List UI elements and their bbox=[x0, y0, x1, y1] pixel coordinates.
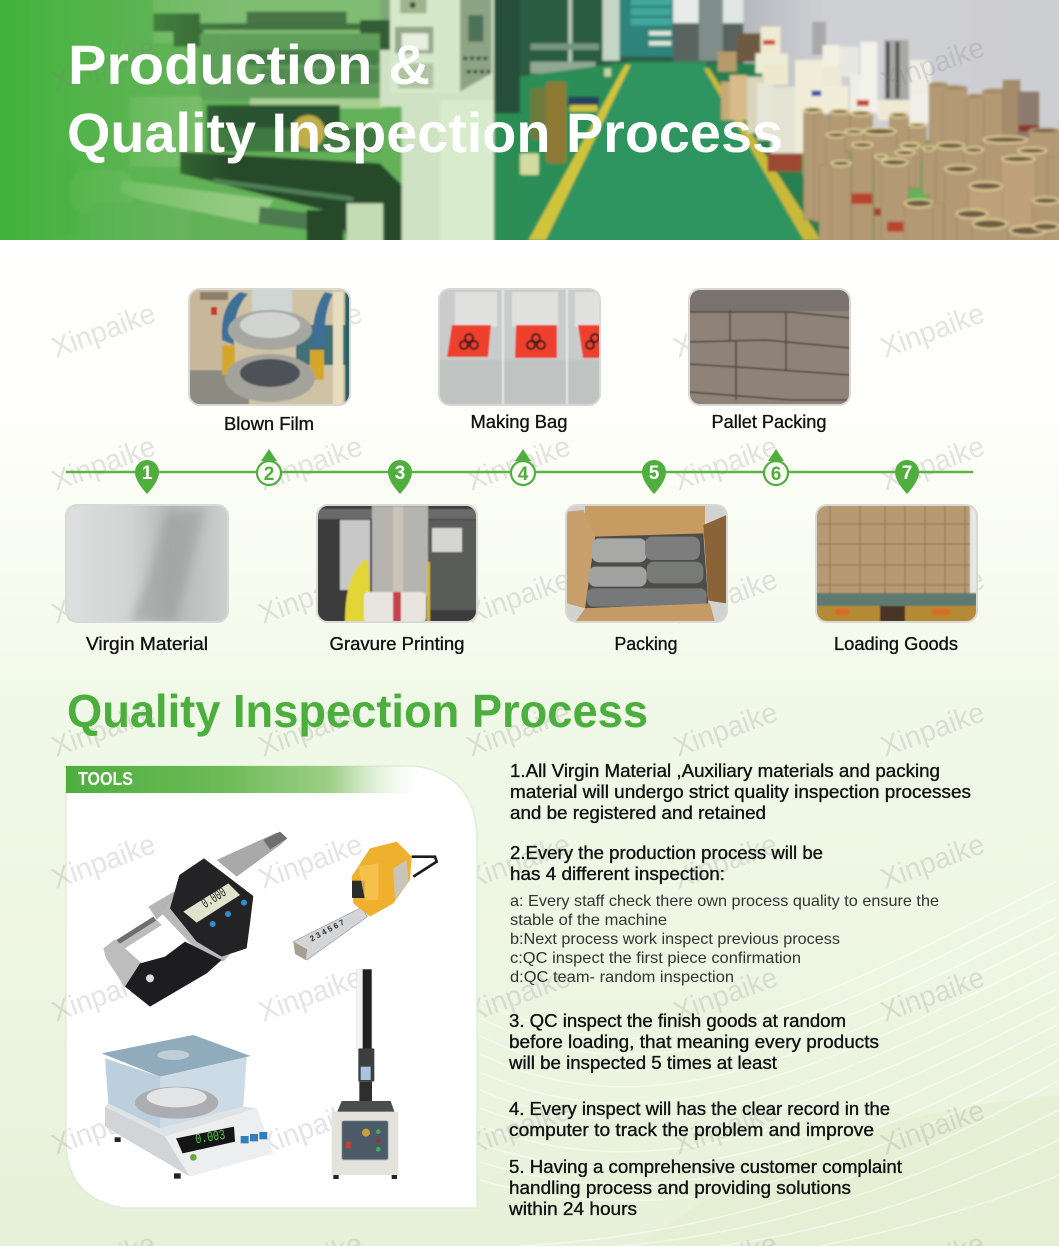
watermarks: Xinpaike bbox=[876, 829, 989, 896]
step marker 5 bbox=[642, 460, 666, 494]
watermarks: Xinpaike bbox=[876, 1095, 989, 1162]
step marker 2 bbox=[257, 449, 281, 485]
text block: item 5: within 24 hours bbox=[508, 1199, 637, 1219]
watermarks on panel: Xinpaike bbox=[254, 829, 367, 896]
watermarks: Xinpaike bbox=[669, 829, 782, 896]
watermarks: Xinpaike bbox=[254, 298, 367, 365]
text block: item 2 bbox=[510, 843, 939, 986]
step labels: bottom row bbox=[86, 634, 958, 654]
watermarks on panel: Xinpaike bbox=[254, 1095, 367, 1162]
watermarks: Xinpaike bbox=[669, 431, 782, 498]
step marker 5: 5 bbox=[649, 463, 660, 484]
step labels: top row bbox=[224, 412, 826, 434]
watermarks: Xinpaike bbox=[669, 1095, 782, 1162]
icon: tape measure bbox=[293, 842, 437, 960]
step photo: blown film bbox=[189, 289, 350, 406]
watermarks: Xinpaike bbox=[254, 697, 367, 764]
aisle objects bbox=[530, 88, 547, 140]
step marker 4: 4 bbox=[518, 464, 529, 485]
icon: digital micrometer bbox=[103, 832, 287, 1007]
step marker 7 bbox=[895, 460, 919, 494]
step marker 3 bbox=[388, 460, 412, 494]
watermarks on panel: Xinpaike bbox=[47, 1095, 160, 1162]
watermarks: Xinpaike bbox=[876, 697, 989, 764]
step marker 4 bbox=[511, 449, 535, 485]
watermarks: Xinpaike bbox=[876, 431, 989, 498]
step labels: top row: Blown Film bbox=[224, 414, 314, 434]
watermarks over hero bbox=[51, 42, 984, 92]
cabinet bbox=[402, 0, 500, 247]
text block: item 3: before loading, that meaning every products bbox=[509, 1032, 879, 1052]
watermarks: Xinpaike bbox=[462, 431, 575, 498]
watermarks: Xinpaike bbox=[669, 962, 782, 1029]
icon: precision balance bbox=[102, 1035, 273, 1179]
watermarks: Xinpaike bbox=[47, 431, 160, 498]
step photo: pallet packing bbox=[689, 289, 850, 405]
watermarks: Xinpaike bbox=[462, 829, 575, 896]
text block: item 2: 2.Every the production process will be bbox=[510, 843, 823, 863]
step marker 2: 2 bbox=[264, 464, 274, 485]
watermarks: Xinpaike bbox=[254, 431, 367, 498]
text block: item 2: a: Every staff check there own process quality to ensure the bbox=[510, 893, 939, 910]
step photo: making bag bbox=[439, 289, 600, 405]
text block: item 4 bbox=[509, 1099, 890, 1140]
step marker 7: 7 bbox=[902, 463, 912, 484]
watermarks: Xinpaike bbox=[876, 564, 989, 631]
step labels: bottom row: Loading Goods bbox=[834, 634, 958, 654]
text block: item 2: b:Next process work inspect previous process bbox=[510, 931, 840, 948]
step photo: gravure printing bbox=[317, 505, 477, 622]
machine area, green tinted bbox=[110, 0, 496, 240]
watermarks: Xinpaike bbox=[462, 962, 575, 1029]
watermarks on panel: Xinpaike bbox=[47, 962, 160, 1029]
frame bbox=[566, 505, 727, 622]
step labels: bottom row: Gravure Printing bbox=[330, 634, 464, 654]
left green fade bbox=[0, 0, 230, 240]
step labels: top row: Making Bag bbox=[470, 412, 568, 432]
watermarks: Xinpaike bbox=[462, 697, 575, 764]
step labels: top row: Pallet Packing bbox=[712, 412, 826, 432]
step marker 1: 1 bbox=[142, 463, 153, 484]
watermarks: Xinpaike bbox=[462, 564, 575, 631]
aisle area bbox=[494, 0, 1059, 247]
step photo: packing bbox=[566, 505, 728, 622]
icon: precision balance: 0.003 bbox=[194, 1128, 226, 1148]
tools header bar bbox=[66, 766, 421, 793]
watermarks on panel: Xinpaike bbox=[47, 829, 160, 896]
watermarks on panel: Xinpaike bbox=[254, 962, 367, 1029]
step labels: bottom row: Packing bbox=[614, 634, 678, 654]
watermarks: Xinpaike bbox=[669, 697, 782, 764]
title: Production & bbox=[68, 33, 430, 96]
icon: tape measure: 2 3 4 5 6 7 bbox=[308, 918, 346, 943]
tools header bar: TOOLS bbox=[78, 769, 133, 789]
text block: item 2: has 4 different inspection: bbox=[510, 864, 725, 884]
text block: item 3 bbox=[508, 1011, 879, 1073]
watermarks bbox=[47, 298, 989, 1246]
text block: item 1 bbox=[510, 761, 971, 823]
watermarks over hero: Xinpaike bbox=[47, 32, 160, 99]
text block: item 4: 4. Every inspect will has the clear record in the bbox=[509, 1099, 890, 1119]
watermarks: Xinpaike bbox=[47, 697, 160, 764]
frame bbox=[189, 289, 350, 405]
watermarks: Xinpaike bbox=[254, 564, 367, 631]
text block: item 1: material will undergo strict quality inspection processes bbox=[510, 782, 971, 802]
text block: item 1: 1.All Virgin Material ,Auxiliary materials and packing bbox=[510, 761, 940, 781]
text block: item 2: stable of the machine bbox=[510, 912, 667, 929]
text block: item 4: computer to track the problem and improve bbox=[509, 1120, 874, 1140]
step photo: virgin material bbox=[66, 505, 228, 622]
watermarks: Xinpaike bbox=[876, 298, 989, 365]
watermarks on panel bbox=[47, 829, 367, 1162]
watermarks: Xinpaike bbox=[47, 298, 160, 365]
step marker 1 bbox=[135, 460, 159, 494]
watermarks: Xinpaike bbox=[669, 298, 782, 365]
text block: item 1: and be registered and retained bbox=[510, 803, 766, 823]
watermarks over hero: Xinpaike bbox=[876, 32, 989, 99]
frame bbox=[66, 505, 228, 622]
step marker 6: 6 bbox=[771, 464, 781, 485]
frame bbox=[689, 289, 850, 405]
watermarks: Xinpaike bbox=[462, 1095, 575, 1162]
hero banner: factory photo bbox=[0, 0, 1059, 247]
frame bbox=[317, 505, 477, 622]
watermarks: Xinpaike bbox=[876, 962, 989, 1029]
text block: item 5: 5. Having a comprehensive customer complaint bbox=[509, 1157, 902, 1177]
title: Quality Inspection Process bbox=[67, 101, 783, 164]
text block: item 5: handling process and providing solutions bbox=[509, 1178, 851, 1198]
text block: item 3: 3. QC inspect the finish goods at random bbox=[509, 1011, 846, 1031]
frame bbox=[816, 505, 977, 622]
white film rolls bbox=[747, 22, 931, 153]
icon: tensile tester bbox=[332, 969, 398, 1179]
timeline bbox=[66, 449, 973, 494]
text block: item 2: d:QC team- random inspection bbox=[510, 969, 734, 986]
section heading: Quality Inspection Process bbox=[67, 685, 648, 737]
boxes bbox=[718, 52, 737, 72]
frame bbox=[439, 289, 600, 405]
text block: item 5 bbox=[508, 1157, 902, 1219]
watermarks: Xinpaike bbox=[47, 564, 160, 631]
text block: item 2: c:QC inspect the first piece confirmation bbox=[510, 950, 801, 967]
title bbox=[67, 33, 783, 164]
watermarks over hero: Xinpaike bbox=[254, 32, 367, 99]
icon: digital micrometer: 0.000 bbox=[199, 885, 230, 913]
floor bbox=[520, 62, 819, 247]
panel: tools bbox=[47, 766, 477, 1208]
cardboard tubes bbox=[804, 80, 1059, 247]
step marker 6 bbox=[764, 449, 788, 485]
step marker 3: 3 bbox=[395, 463, 405, 484]
text block: item 3: will be inspected 5 times at least bbox=[508, 1053, 777, 1073]
wall bbox=[743, 0, 1059, 140]
watermarks: Xinpaike bbox=[669, 564, 782, 631]
step labels: bottom row: Virgin Material bbox=[86, 634, 208, 654]
step photo: loading goods bbox=[816, 505, 977, 622]
